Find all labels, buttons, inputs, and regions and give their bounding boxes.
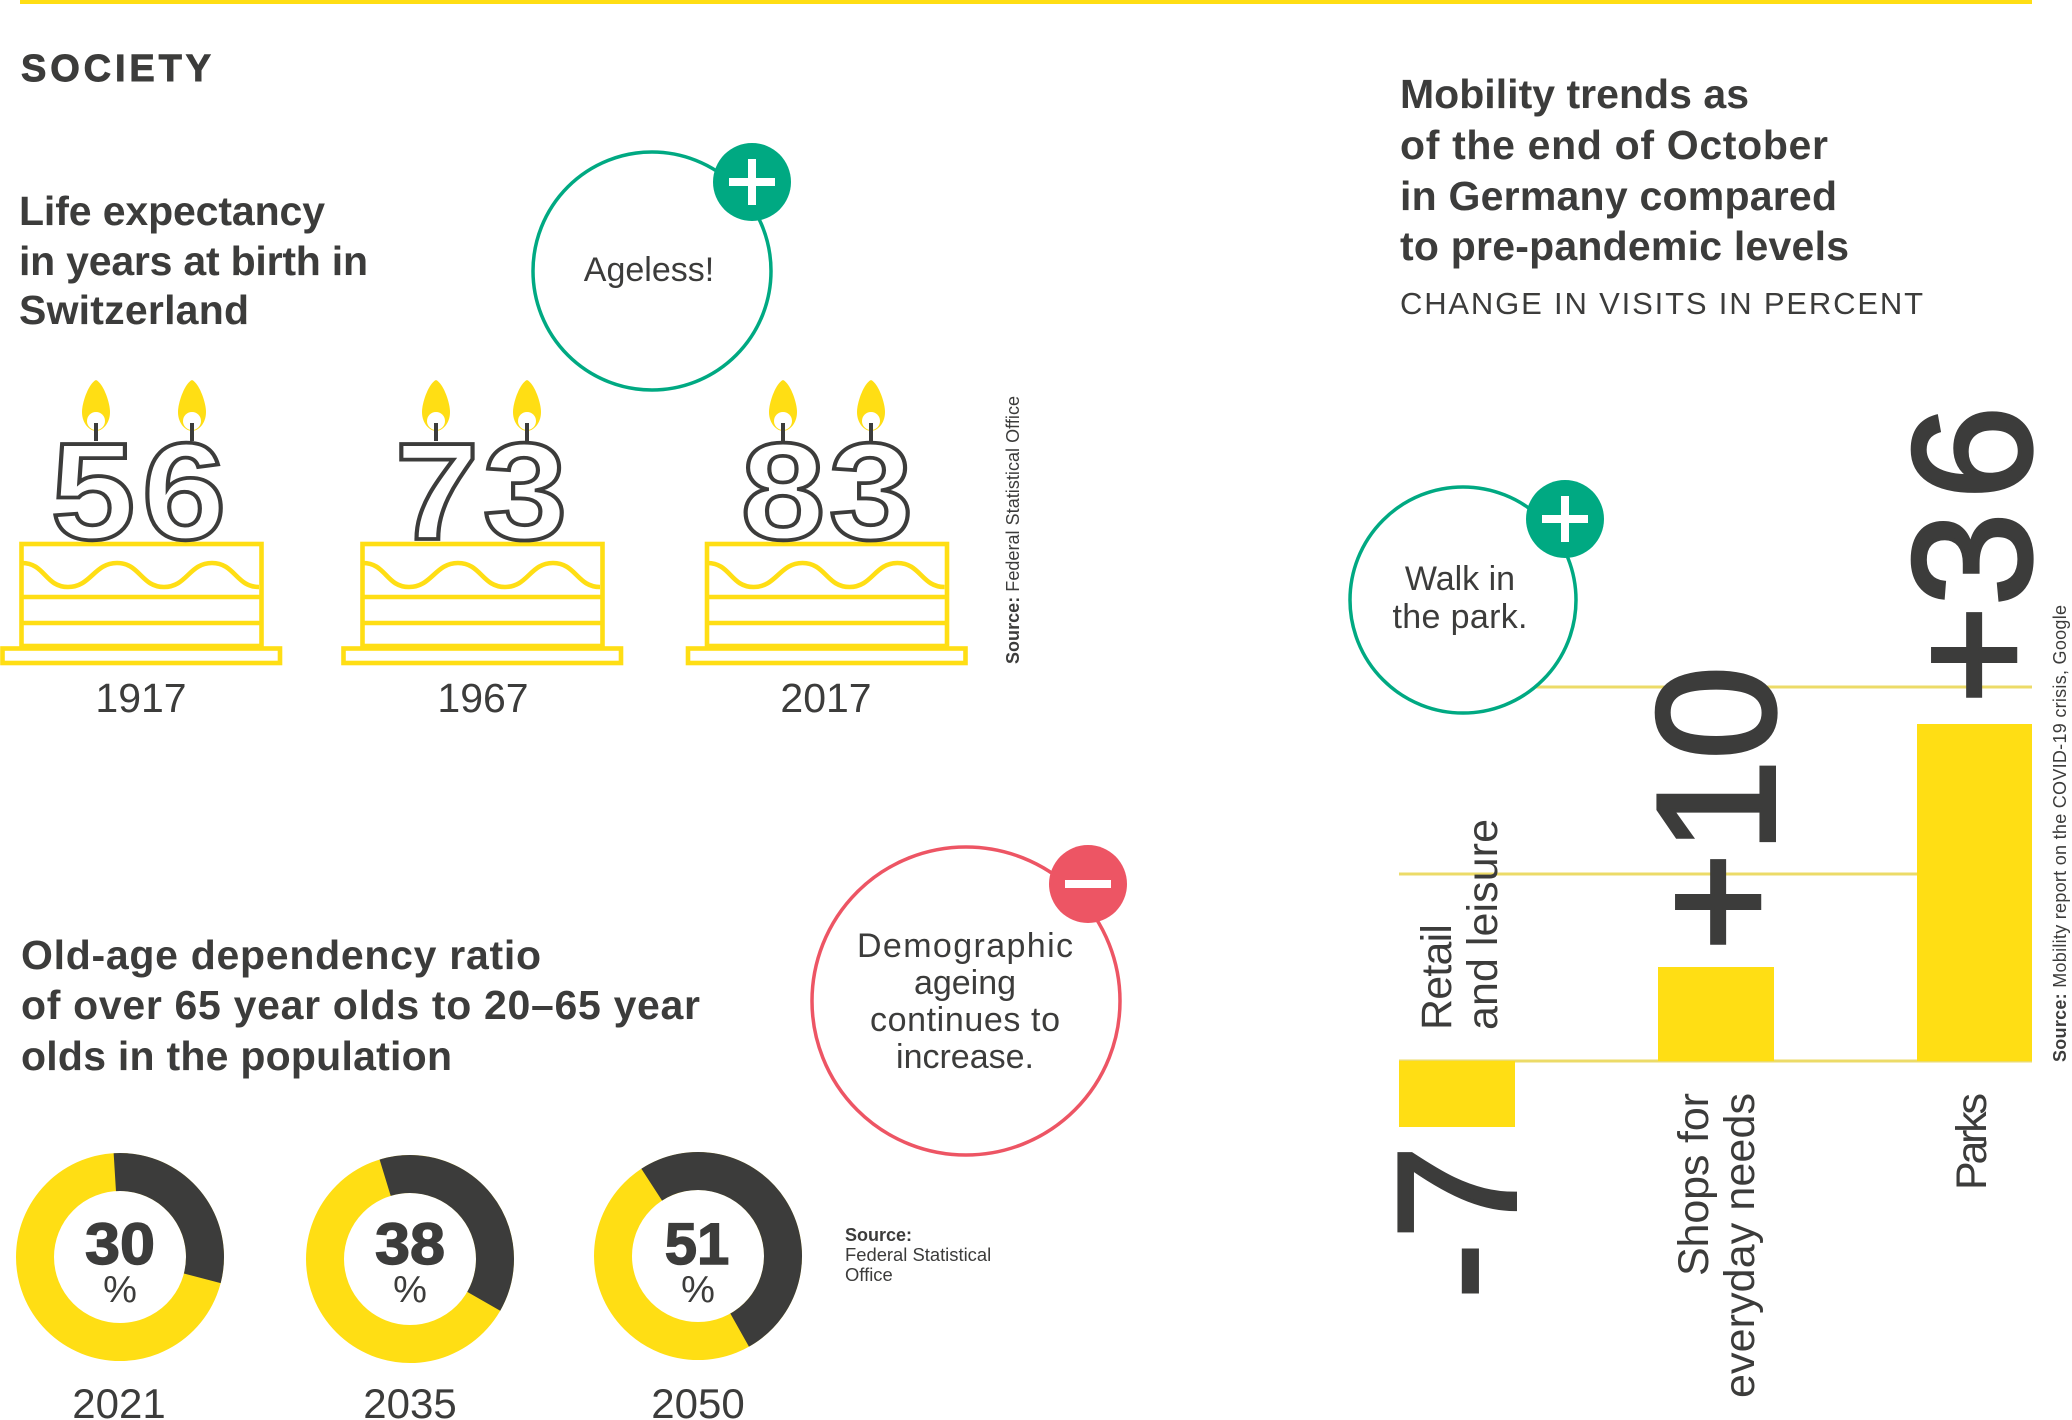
heading: mobility trends: in Germany compared bbox=[1400, 173, 1837, 219]
callout: demographic ageing: continues to bbox=[870, 1001, 1060, 1039]
donut chart 2050: 51 percent: % bbox=[681, 1269, 715, 1311]
label: shops for everyday needs: Shops for bbox=[1670, 1093, 1718, 1276]
heading: life expectancy: Life expectancy bbox=[19, 188, 325, 234]
label: parks: Parks bbox=[1948, 1093, 1996, 1190]
source: dependency ratio: Office bbox=[845, 1264, 893, 1285]
heading: mobility trends: to pre-pandemic levels bbox=[1400, 223, 1849, 269]
heading: old-age dependency ratio: of over 65 year olds to 20–65 year bbox=[21, 982, 700, 1028]
donut chart 2021: 30 percent: 30 bbox=[85, 1212, 155, 1277]
value: plus 10: +10 bbox=[1622, 666, 1810, 951]
source: mobility report: Source: Mobility report on the COVID-19 crisis, Google bbox=[2050, 605, 2070, 1062]
heading: life expectancy: in years at birth in bbox=[19, 238, 368, 284]
candle digits 73: 7 bbox=[395, 414, 479, 568]
year label 1967: 1967 bbox=[437, 675, 529, 721]
icon: candle flames 73 bbox=[422, 380, 541, 441]
cake drawing bbox=[688, 544, 966, 663]
label: shops for everyday needs: everyday needs bbox=[1716, 1093, 1764, 1398]
label: shops for everyday needs bbox=[1670, 1093, 1764, 1398]
candle digits 83: 8 bbox=[741, 414, 825, 568]
donut chart 2021: 30 percent: % bbox=[103, 1269, 137, 1311]
bar chart: mobility bbox=[1363, 406, 2066, 1398]
callout: walk in the park: Walk in bbox=[1405, 560, 1515, 598]
donut chart 2035: 38 percent: % bbox=[393, 1269, 427, 1311]
heading: old-age dependency ratio bbox=[21, 932, 700, 1079]
label: retail and leisure bbox=[1413, 819, 1507, 1030]
bar: retail and leisure bbox=[1399, 1061, 1515, 1127]
donut chart 2035: 38 percent: 38 bbox=[375, 1212, 445, 1277]
candle digits 83: 3 bbox=[829, 414, 913, 568]
cake drawing bbox=[2, 544, 280, 663]
candle digits 73 bbox=[395, 414, 567, 568]
heading: mobility trends: of the end of October bbox=[1400, 122, 1828, 168]
value: minus 7: -7 bbox=[1363, 1146, 1551, 1299]
bar: shops for everyday needs bbox=[1658, 967, 1774, 1061]
candle digits 56 bbox=[51, 414, 226, 568]
callout: Ageless bbox=[533, 143, 791, 390]
year label 1917: 1917 bbox=[95, 675, 187, 721]
value: plus 36: +36 bbox=[1878, 406, 2066, 704]
cake drawing bbox=[344, 544, 621, 663]
callout: walk in the park: the park. bbox=[1392, 598, 1528, 636]
candle digits 83 bbox=[741, 414, 913, 568]
heading: life expectancy bbox=[19, 188, 368, 333]
callout: demographic ageing: ageing bbox=[914, 964, 1016, 1002]
source: dependency ratio: Source: bbox=[845, 1225, 912, 1245]
label: retail and leisure: Retail bbox=[1413, 924, 1461, 1030]
cake 2017 with candles 83 bbox=[688, 380, 966, 663]
icon: candle flames 83 bbox=[769, 380, 885, 441]
bar: parks bbox=[1917, 724, 2032, 1061]
donut chart 2050: 51 percent bbox=[580, 1138, 816, 1374]
heading: mobility trends bbox=[1400, 71, 1849, 269]
callout: demographic ageing: increase. bbox=[896, 1038, 1034, 1076]
section title: Society: SOCIETY bbox=[21, 48, 211, 90]
callout: demographic ageing bbox=[812, 845, 1127, 1155]
cake 1917 with candles 56 bbox=[2, 380, 280, 663]
label: retail and leisure: and leisure bbox=[1459, 819, 1507, 1030]
heading: life expectancy: Switzerland bbox=[19, 287, 249, 333]
year label 2017: 2017 bbox=[780, 675, 872, 721]
source: dependency ratio bbox=[845, 1225, 991, 1285]
cake 1967 with candles 73 bbox=[344, 380, 621, 663]
callout: walk in the park bbox=[1350, 480, 1604, 713]
donut chart 2035: 38 percent bbox=[304, 1153, 516, 1365]
callout: Ageless: Ageless! bbox=[584, 251, 714, 289]
heading: mobility trends: Mobility trends as bbox=[1400, 71, 1749, 117]
callout: demographic ageing: Demographic bbox=[857, 927, 1073, 965]
source: life expectancy: Source: Federal Statistical Office bbox=[1003, 396, 1023, 664]
donut chart 2021: 30 percent bbox=[30, 1167, 210, 1347]
donut chart 2050: 51 percent: 51 bbox=[665, 1212, 729, 1277]
candle digits 56: 6 bbox=[142, 414, 226, 568]
icon: candle flames 56 bbox=[82, 380, 206, 441]
subtitle: change in visits: CHANGE IN VISITS IN PERCENT bbox=[1400, 286, 1923, 321]
heading: old-age dependency ratio: olds in the population bbox=[21, 1033, 452, 1079]
candle digits 56: 5 bbox=[51, 414, 135, 568]
heading: old-age dependency ratio: Old-age dependency ratio bbox=[21, 932, 541, 978]
source: dependency ratio: Federal Statistical bbox=[845, 1244, 991, 1265]
candle digits 73: 3 bbox=[483, 414, 567, 568]
